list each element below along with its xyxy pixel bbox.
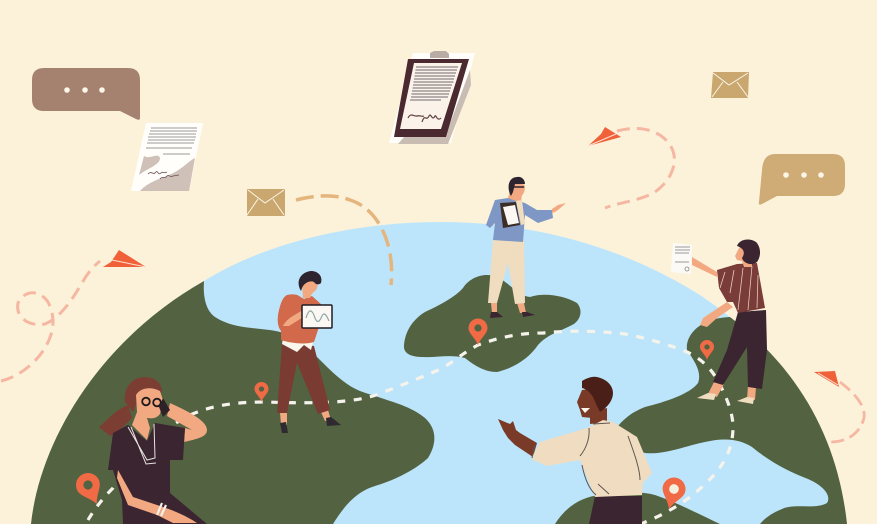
route: dashed path across the globe <box>88 331 733 524</box>
bottom island <box>555 492 720 524</box>
ankles <box>708 382 756 400</box>
person: woman with document <box>671 240 767 404</box>
document <box>671 243 692 274</box>
pants <box>589 496 642 524</box>
pin: large left <box>72 469 108 509</box>
paper plane: top <box>588 127 621 146</box>
person: man with tablet <box>277 271 341 433</box>
person: woman with glasses on phone <box>99 377 207 524</box>
neck <box>590 408 607 424</box>
face and neck <box>735 245 752 267</box>
dashed trail: envelope to ocean <box>296 196 392 285</box>
stripes <box>720 266 758 310</box>
envelope right <box>711 72 749 98</box>
orange sweater <box>278 294 322 343</box>
cream shirt <box>532 420 652 497</box>
hair <box>299 271 321 291</box>
paper plane: left <box>103 250 146 267</box>
globe ocean <box>31 222 847 524</box>
envelope left <box>247 189 285 216</box>
ponytail <box>99 405 132 436</box>
signed document <box>131 123 203 191</box>
glasses <box>142 398 161 406</box>
dashed trail: right plane <box>830 382 864 442</box>
face and neck <box>132 388 163 440</box>
paper plane: right <box>814 371 839 387</box>
pin: bottom island <box>658 475 688 512</box>
folder and paper <box>500 202 520 228</box>
striped shirt <box>717 263 765 313</box>
map pins <box>72 318 714 512</box>
black trousers <box>713 310 767 389</box>
pin: near tablet man <box>254 382 268 402</box>
feet <box>697 393 754 404</box>
glasses <box>514 186 524 188</box>
clipboard with contract <box>389 51 475 144</box>
raised arm <box>167 403 207 442</box>
right continent <box>618 317 847 524</box>
pin: right continent <box>700 340 714 360</box>
shirt folds <box>532 423 640 495</box>
shoes <box>490 312 535 318</box>
person: man with folder <box>486 177 566 318</box>
black dress <box>108 423 207 524</box>
legs <box>277 343 330 414</box>
arm to document <box>692 257 717 277</box>
blue sweater <box>486 198 553 242</box>
pointing hand <box>552 203 566 213</box>
hair <box>125 377 162 412</box>
dashed trail: left plane with loop <box>1 261 100 381</box>
hair <box>582 377 613 412</box>
left continent <box>31 281 434 524</box>
arm <box>117 470 197 523</box>
shirt hem <box>282 338 314 352</box>
ankles <box>280 410 331 425</box>
neck and head <box>302 279 318 298</box>
pin: central island <box>468 318 488 345</box>
phone <box>159 398 170 417</box>
central island <box>404 275 581 372</box>
shoes <box>280 422 288 433</box>
lower arm <box>700 302 733 327</box>
legs <box>488 240 525 304</box>
forearm <box>283 310 305 326</box>
bracelets <box>157 503 166 516</box>
dashed trail: top plane <box>605 129 674 208</box>
speech bubble: tan <box>759 154 845 205</box>
ankles <box>491 303 526 313</box>
tablet <box>302 305 332 328</box>
face <box>577 388 602 418</box>
neck <box>508 190 522 203</box>
forearm and pointing hand <box>498 419 537 457</box>
hair <box>737 240 760 264</box>
person: man in cream shirt pointing <box>498 377 652 524</box>
speech bubble: brown <box>32 68 140 120</box>
hair <box>509 177 525 196</box>
head <box>511 182 525 197</box>
necklace <box>128 424 156 464</box>
